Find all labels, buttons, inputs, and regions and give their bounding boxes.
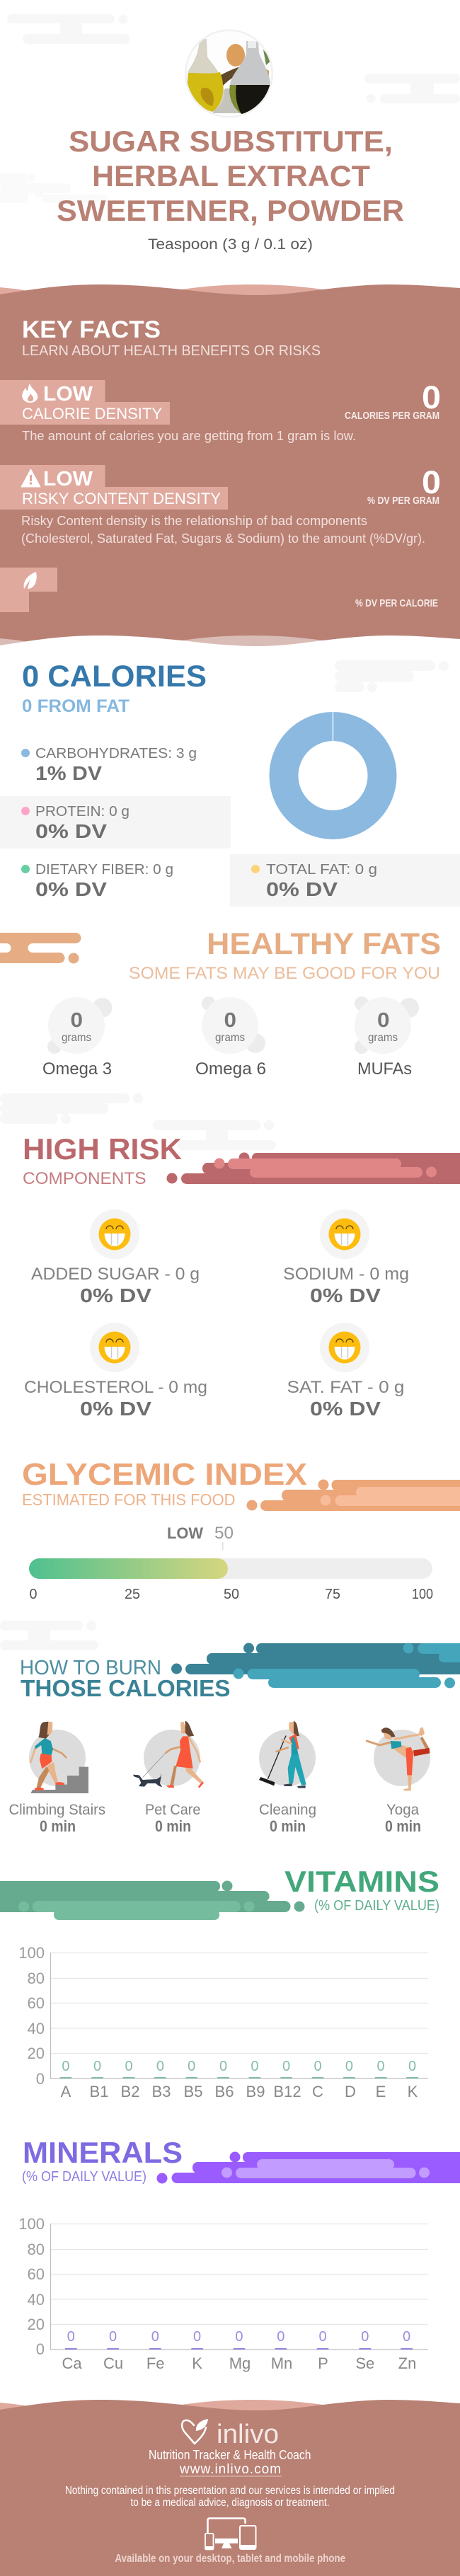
bar chart: minerals: 0 <box>361 2329 369 2345</box>
risky density description: Risky Content density is the relationship of bad components <box>21 514 367 528</box>
disclaimer: Nothing contained in this presentation and our services is intended or implied <box>65 2485 395 2497</box>
calorie density description: The amount of calories you are getting from 1 gram is low. <box>22 429 356 443</box>
bar chart: vitamins: B6 <box>215 2083 234 2100</box>
glycemic gauge: LOW <box>167 1524 203 1542</box>
macro: protein <box>0 796 231 849</box>
bar chart: minerals: 80 <box>28 2241 45 2258</box>
logo: inlivo: inlivo <box>217 2420 279 2449</box>
macro: total fat: TOTAL FAT: 0 g <box>266 861 377 878</box>
calories per gram value: 0 <box>422 379 441 415</box>
bar chart: minerals <box>18 2215 428 2372</box>
glycemic gauge <box>29 1524 433 1602</box>
risk item: cholesterol <box>24 1323 207 1420</box>
risky density description <box>21 514 425 546</box>
heading: how to burn: HOW TO BURN <box>20 1657 161 1679</box>
glycemic banner shape <box>246 1479 460 1511</box>
activity: climbing stairs: Climbing Stairs <box>8 1802 105 1818</box>
macro: protein: PROTEIN: 0 g <box>35 803 130 820</box>
macro: carbohydrates: 1% DV <box>35 762 102 784</box>
vitamins banner shape <box>0 1881 304 1920</box>
bar chart: vitamins: 40 <box>28 2020 45 2037</box>
macro: dietary fiber <box>21 861 173 900</box>
dv per gram value: % DV PER GRAM <box>367 495 439 507</box>
bar chart: minerals: 0 <box>277 2329 284 2345</box>
bar chart: vitamins: 0 <box>345 2059 353 2074</box>
macro: protein: 0% DV <box>35 820 107 842</box>
bar chart: vitamins: B5 <box>184 2083 202 2100</box>
heading: calories: 0 FROM FAT <box>22 696 130 716</box>
fat badge: mufas <box>355 996 419 1079</box>
activity: yoga: Yoga <box>386 1802 419 1818</box>
bar chart: minerals: 40 <box>28 2291 45 2308</box>
icon: warning <box>21 469 40 487</box>
calories per gram value: CALORIES PER GRAM <box>345 410 439 422</box>
icon: leaf <box>24 572 37 589</box>
risk item: cholesterol: 0% DV <box>80 1398 151 1420</box>
bar chart: minerals: 0 <box>403 2329 410 2345</box>
bar chart: vitamins: A <box>61 2083 71 2100</box>
bar chart: vitamins: 0 <box>125 2059 133 2074</box>
risk item: sodium: 0% DV <box>310 1284 381 1306</box>
bar chart: minerals: Mg <box>229 2354 251 2372</box>
title <box>57 125 404 227</box>
tagline: Nutrition Tracker & Health Coach <box>149 2448 311 2462</box>
panel: footer <box>0 2400 460 2576</box>
activity: yoga: 0 min <box>385 1817 421 1835</box>
icon: grin <box>320 1323 369 1372</box>
risk item: sodium <box>283 1209 409 1306</box>
macro: carbohydrates: CARBOHYDRATES: 3 g <box>35 745 197 761</box>
heading: glycemic index: ESTIMATED FOR THIS FOOD <box>22 1490 235 1509</box>
bar chart: minerals: Ca <box>62 2354 82 2372</box>
bar chart: minerals: Fe <box>146 2354 165 2372</box>
macro: total fat <box>230 854 460 907</box>
title: SUGAR SUBSTITUTE, <box>69 125 393 158</box>
heading: vitamins: (% OF DAILY VALUE) <box>314 1898 439 1914</box>
heading: minerals: (% OF DAILY VALUE) <box>22 2169 146 2185</box>
background clouds <box>0 14 460 1650</box>
risk item: saturated fat: 0% DV <box>310 1398 381 1420</box>
dv per gram value: 0 <box>422 464 441 500</box>
panel: key facts <box>0 284 460 655</box>
bar chart: vitamins: E <box>376 2083 386 2100</box>
fat badge: mufas: 0 <box>377 1009 389 1032</box>
bar chart: minerals: 0 <box>67 2329 75 2345</box>
fat badge: omega 6 <box>195 996 266 1079</box>
fat badge: omega 6: 0 <box>224 1009 236 1032</box>
bar chart: minerals: Cu <box>103 2354 123 2372</box>
bar chart: minerals: 100 <box>18 2215 45 2233</box>
heading: key facts: KEY FACTS <box>22 316 161 343</box>
bar chart: vitamins: 0 <box>62 2059 69 2074</box>
bar chart: minerals: 0 <box>109 2329 117 2345</box>
fat badge: mufas: MUFAs <box>357 1059 412 1079</box>
illustration: woman in yoga pose <box>367 1727 430 1790</box>
heading: high risk <box>23 1132 182 1188</box>
bar chart: minerals: 0 <box>193 2329 201 2345</box>
fat badge: omega 3: grams <box>62 1032 91 1044</box>
glycemic gauge: 50 <box>224 1587 239 1602</box>
bar chart: vitamins: 0 <box>251 2059 258 2074</box>
bar chart: minerals: 0 <box>151 2329 159 2345</box>
icon: grin <box>90 1323 139 1372</box>
subheading: LEARN ABOUT HEALTH BENEFITS OR RISKS <box>22 343 321 359</box>
heading: how to burn: THOSE CALORIES <box>21 1675 231 1701</box>
macro: dietary fiber: 0% DV <box>35 878 107 900</box>
dv per gram value <box>367 464 441 507</box>
bar chart: vitamins: B1 <box>90 2083 108 2100</box>
activity: pet care <box>133 1721 204 1835</box>
risk item: saturated fat: SAT. FAT - 0 g <box>287 1378 405 1397</box>
heading: healthy fats: SOME FATS MAY BE GOOD FOR YOU <box>129 964 440 983</box>
bar chart: minerals: 0 <box>318 2329 327 2345</box>
bar chart: vitamins: 0 <box>219 2059 227 2074</box>
disclaimer <box>65 2485 395 2509</box>
calorie density label: LOW <box>43 383 93 406</box>
serving size: Teaspoon (3 g / 0.1 oz) <box>148 236 313 253</box>
calorie density label: CALORIE DENSITY <box>22 405 162 422</box>
activity: pet care: Pet Care <box>145 1802 201 1818</box>
risky content density label: RISKY CONTENT DENSITY <box>22 490 221 507</box>
bar chart: vitamins: C <box>312 2083 323 2100</box>
activity: cleaning: 0 min <box>270 1817 306 1835</box>
activity: yoga <box>367 1727 430 1835</box>
disclaimer: to be a medical advice, diagnosis or treatment. <box>130 2497 330 2509</box>
fat badge: omega 3 <box>42 997 112 1079</box>
icon: flame <box>22 384 38 403</box>
burn banner shape <box>171 1643 460 1689</box>
bar chart: minerals: Zn <box>398 2354 416 2372</box>
bar chart: vitamins: 100 <box>18 1944 45 1962</box>
bar chart: minerals: K <box>192 2354 202 2372</box>
bar chart: vitamins: B2 <box>121 2083 139 2100</box>
heading: calories: 0 CALORIES <box>22 660 207 694</box>
website link: www.inlivo.com <box>179 2462 281 2477</box>
glycemic gauge: 50 <box>214 1524 234 1543</box>
bar chart: minerals: 0 <box>36 2340 45 2358</box>
activity: climbing stairs <box>8 1722 105 1835</box>
bar chart: minerals: 60 <box>28 2265 45 2283</box>
illustration: woman on stairs <box>30 1722 88 1793</box>
bar chart: vitamins: 0 <box>93 2059 101 2074</box>
bar chart: vitamins: 0 <box>36 2070 45 2088</box>
fat badge: omega 6: grams <box>215 1032 245 1044</box>
risk item: cholesterol: CHOLESTEROL - 0 mg <box>24 1378 207 1397</box>
healthy fats banner shape <box>0 933 81 964</box>
heading: minerals <box>22 2136 183 2185</box>
heading: vitamins <box>284 1865 439 1914</box>
fat badge: mufas: grams <box>368 1032 398 1044</box>
icon: devices <box>205 2518 256 2550</box>
bar chart: vitamins: 60 <box>28 1994 45 2012</box>
heading: vitamins: VITAMINS <box>284 1865 439 1898</box>
bar chart: vitamins: K <box>408 2083 418 2100</box>
risky density description: (Cholesterol, Saturated Fat, Sugars & Sodium) to the amount (%DV/gr). <box>21 531 425 546</box>
bar chart: vitamins: 0 <box>156 2059 164 2074</box>
nutrient density label <box>0 568 57 612</box>
bar chart: vitamins <box>18 1944 428 2100</box>
fat badge: omega 6: Omega 6 <box>195 1059 266 1079</box>
logo: inlivo <box>182 2419 279 2449</box>
heading: healthy fats <box>129 927 441 983</box>
bar chart: vitamins: B12 <box>273 2083 301 2100</box>
bar chart: vitamins: 0 <box>377 2059 385 2074</box>
bar chart: vitamins: 20 <box>28 2045 45 2062</box>
bar chart: minerals: 0 <box>235 2329 243 2345</box>
availability note: Available on your desktop, tablet and mobile phone <box>115 2553 345 2565</box>
illustration: woman sweeping <box>259 1721 306 1788</box>
calories per gram value <box>345 379 441 422</box>
heading: glycemic index <box>22 1457 307 1509</box>
bar chart: minerals: P <box>318 2354 328 2372</box>
high risk banner shape <box>167 1152 460 1184</box>
heading: glycemic index: GLYCEMIC INDEX <box>22 1457 307 1492</box>
risk item: added sugar: ADDED SUGAR - 0 g <box>31 1265 200 1284</box>
activity: pet care: 0 min <box>155 1817 191 1835</box>
glycemic gauge: 25 <box>125 1587 140 1602</box>
bar chart: vitamins: D <box>345 2083 356 2100</box>
heading: minerals: MINERALS <box>23 2136 183 2169</box>
activity: cleaning <box>259 1721 316 1835</box>
heading: healthy fats: HEALTHY FATS <box>207 927 441 961</box>
bar chart: vitamins: B9 <box>246 2083 265 2100</box>
risk item: added sugar: 0% DV <box>80 1284 151 1306</box>
activity: climbing stairs: 0 min <box>40 1817 76 1835</box>
bar chart: vitamins: 0 <box>188 2059 195 2074</box>
icon: grin <box>320 1209 369 1259</box>
activity: cleaning: Cleaning <box>259 1802 316 1818</box>
macro: carbohydrates <box>21 745 197 784</box>
minerals banner shape <box>157 2151 460 2184</box>
bar chart: vitamins: 0 <box>408 2059 416 2074</box>
calorie density label <box>0 380 170 425</box>
title: HERBAL EXTRACT <box>92 159 370 192</box>
heading: how to burn <box>20 1657 231 1701</box>
title: SWEETENER, POWDER <box>57 194 404 227</box>
glycemic gauge: 100 <box>412 1587 433 1602</box>
bar chart: vitamins: 0 <box>314 2059 322 2074</box>
risk item: added sugar <box>31 1209 200 1306</box>
bar chart: minerals: Mn <box>271 2354 292 2372</box>
risk item: saturated fat <box>287 1323 405 1420</box>
bar chart: vitamins: B3 <box>152 2083 171 2100</box>
fat badge: omega 3: Omega 3 <box>42 1059 112 1079</box>
risk item: sodium: SODIUM - 0 mg <box>283 1265 409 1284</box>
fat badge: omega 3: 0 <box>71 1009 83 1032</box>
macro: dietary fiber: DIETARY FIBER: 0 g <box>35 861 173 878</box>
bar chart: minerals: 20 <box>28 2316 45 2333</box>
bar chart: minerals: Se <box>355 2354 374 2372</box>
food photo <box>185 30 272 117</box>
donut chart <box>284 711 382 825</box>
heading: calories <box>22 660 207 716</box>
risky content density label <box>0 465 228 510</box>
icon: grin <box>90 1209 139 1259</box>
macro: total fat: 0% DV <box>266 878 338 900</box>
glycemic gauge: 75 <box>325 1587 340 1602</box>
bar chart: vitamins: 0 <box>282 2059 290 2074</box>
illustration: woman walking dog <box>133 1721 204 1788</box>
dv per calorie label: % DV PER CALORIE <box>355 598 438 609</box>
bar chart: vitamins: 80 <box>28 1970 45 1987</box>
glycemic gauge: 0 <box>30 1587 37 1602</box>
heading: high risk: HIGH RISK <box>23 1132 182 1166</box>
risky content density label: LOW <box>43 468 93 490</box>
heading: high risk: COMPONENTS <box>23 1169 146 1188</box>
